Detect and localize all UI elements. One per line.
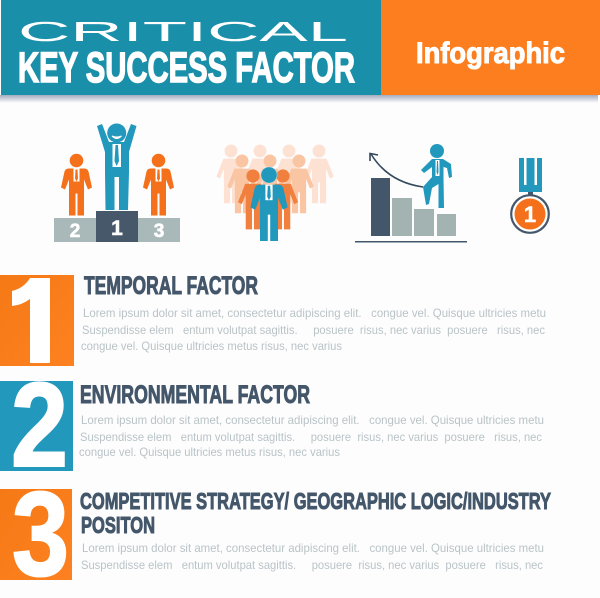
- body text: [81, 541, 544, 572]
- front orange figures: [238, 169, 298, 229]
- header infographic panel: Infographic: [416, 37, 565, 70]
- body text: [81, 306, 546, 353]
- icon: medal: 1: [524, 202, 536, 227]
- body text: Suspendisse elem entum volutpat sagittis. posuere risus, nec varius posuere risus, nec: [80, 430, 542, 444]
- back row figures: [216, 145, 334, 203]
- heading: key success factor: KEY SUCCESS FACTOR: [18, 44, 355, 92]
- number block 3: 3: [12, 467, 69, 598]
- figure: third place: [143, 154, 174, 216]
- body text: congue vel. Quisque ultricies metus risus, nec varius: [81, 339, 342, 353]
- heading: TEMPORAL FACTOR: [84, 272, 258, 300]
- number block 1: 1: [17, 255, 63, 389]
- middle row figures: [227, 155, 314, 213]
- heading: critical: CRITICAL: [18, 16, 348, 47]
- figure: second place: [61, 154, 92, 216]
- heading: [80, 488, 551, 538]
- heading: POSITON: [81, 512, 155, 538]
- body text: Lorem ipsum dolor sit amet, consectetur adipiscing elit. congue vel. Quisque ultricies metu: [81, 413, 544, 427]
- section 3: competitive strategy: [0, 467, 551, 598]
- body text: Lorem ipsum dolor sit amet, consectetur adipiscing elit. congue vel. Quisque ultricies metu: [82, 541, 544, 555]
- podium: 3: [154, 221, 164, 242]
- heading: ENVIRONMENTAL FACTOR: [80, 381, 310, 409]
- body text: Suspendisse elem entum volutpat sagittis. posuere risus, nec varius posuere risus, nec: [82, 323, 545, 337]
- body text: Lorem ipsum dolor sit amet, consectetur adipiscing elit. congue vel. Quisque ultricies metu: [83, 306, 546, 320]
- bar chart: [355, 178, 467, 242]
- icon: podium with three winners: [54, 124, 180, 242]
- leader figure: [250, 167, 288, 241]
- icon: growth bars with climbing figure: [355, 144, 467, 242]
- header infographic panel: [381, 0, 600, 95]
- podium: 2: [70, 221, 80, 242]
- number block 2: 2: [11, 358, 68, 492]
- header banner: [0, 0, 600, 103]
- body text: [79, 413, 544, 459]
- figure: winner with raised arms: [97, 124, 136, 210]
- arrow: [370, 154, 423, 187]
- body text: congue vel. Quisque ultricies metus risus, nec varius: [79, 445, 340, 459]
- podium: 1: [111, 217, 123, 240]
- body text: Suspendisse elem entum volutpat sagittis. posuere risus, nec varius posuere risus, nec: [81, 558, 543, 572]
- icon: team crowd with leader: [216, 145, 334, 241]
- section 1: temporal factor: [0, 275, 546, 366]
- number block 1: [0, 275, 74, 366]
- icon: medal: [511, 158, 549, 233]
- header title panel: [1, 0, 381, 95]
- podium: [54, 211, 180, 242]
- figure: climbing person: [421, 144, 452, 208]
- section 2: environmental factor: [0, 358, 544, 492]
